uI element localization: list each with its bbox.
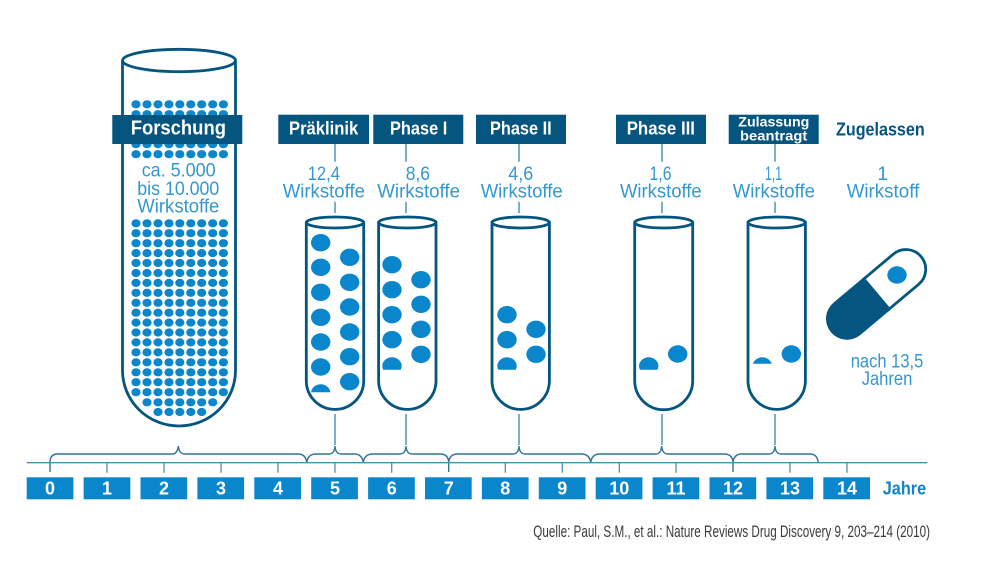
tube: Phase III	[635, 217, 693, 410]
header: Zulassung beantragt: Zulassung	[738, 114, 809, 130]
dots: Forschung tube contents	[131, 100, 228, 416]
year boxes 0 to 14: 14	[837, 478, 857, 498]
label: 1,6 Wirkstoffe: Wirkstoffe	[620, 180, 702, 202]
year boxes 0 to 14: 12	[723, 478, 743, 498]
label: 12,4 Wirkstoffe	[283, 163, 365, 202]
label: 8,6 Wirkstoffe	[377, 163, 460, 202]
label: 12,4 Wirkstoffe: 12,4	[308, 163, 340, 185]
tube: Phase I	[379, 217, 436, 409]
header: Zugelassen: Zugelassen	[836, 118, 925, 139]
label: 8,6 Wirkstoffe: 8,6	[406, 163, 430, 185]
header: Forschung	[112, 115, 242, 144]
year boxes 0 to 14: 6	[387, 478, 397, 498]
label: 4,6 Wirkstoffe: Wirkstoffe	[481, 180, 563, 202]
header: Forschung: Forschung	[131, 117, 226, 140]
tube: Phase II	[492, 217, 549, 409]
label: nach 13,5 Jahren: Jahren	[862, 368, 912, 390]
axis label: Jahre: Jahre	[883, 478, 926, 498]
label: 1 Wirkstoff: Wirkstoff	[847, 180, 920, 202]
timeline axis	[27, 463, 927, 473]
braces: phase durations	[50, 446, 818, 472]
label: nach 13,5 Jahren: nach 13,5	[851, 350, 923, 372]
header: Phase II: Phase II	[490, 118, 552, 138]
year boxes 0 to 14: 9	[557, 478, 567, 498]
header: Phase I	[373, 115, 463, 144]
year boxes 0 to 14: 3	[216, 478, 226, 498]
infographic: drug development funnel	[26, 48, 930, 540]
header: Phase II	[476, 115, 566, 144]
year boxes 0 to 14: 7	[444, 478, 454, 498]
header: Phase III	[616, 115, 706, 144]
label: 1,6 Wirkstoffe: 1,6	[650, 163, 672, 185]
label: 1 Wirkstoff	[847, 163, 920, 202]
year boxes 0 to 14: 5	[330, 478, 340, 498]
label: nach 13,5 Jahren	[851, 350, 923, 390]
label: 1,1 Wirkstoffe: Wirkstoffe	[733, 180, 815, 202]
year boxes 0 to 14: 0	[45, 478, 55, 498]
label: 4,6 Wirkstoffe: 4,6	[508, 163, 533, 185]
connectors between headers, labels and tubes	[335, 144, 775, 445]
tube: Zulassung beantragt	[748, 217, 805, 409]
year boxes 0 to 14: 1	[102, 478, 112, 498]
year boxes 0 to 14: 13	[780, 478, 800, 498]
tube: Präklinik	[306, 217, 364, 409]
year boxes 0 to 14: 10	[609, 478, 629, 498]
header: Phase III: Phase III	[627, 118, 695, 138]
label: 8,6 Wirkstoffe: Wirkstoffe	[377, 180, 460, 202]
label: 1,6 Wirkstoffe	[620, 163, 702, 202]
label: Forschung count: ca. 5.000	[142, 160, 216, 182]
label: 1,1 Wirkstoffe	[733, 163, 815, 202]
header: Zulassung beantragt: beantragt	[740, 128, 808, 144]
header: Zulassung beantragt	[729, 114, 819, 144]
label: 1,1 Wirkstoffe: 1,1	[765, 163, 782, 185]
year boxes 0 to 14	[27, 477, 870, 499]
header: Präklinik	[278, 115, 369, 144]
icon: capsule	[817, 241, 935, 348]
label: 12,4 Wirkstoffe: Wirkstoffe	[283, 180, 365, 202]
header: Phase I: Phase I	[390, 118, 447, 138]
year boxes 0 to 14: 8	[500, 478, 510, 498]
year boxes 0 to 14: 11	[666, 478, 686, 498]
tube: Forschung	[122, 49, 236, 426]
label: 1 Wirkstoff: 1	[877, 163, 888, 185]
label: Forschung count: bis 10.000	[137, 178, 219, 200]
header: Präklinik: Präklinik	[289, 118, 359, 138]
label: 4,6 Wirkstoffe	[481, 163, 563, 202]
label: Forschung count: Wirkstoffe	[137, 196, 219, 218]
label: Forschung count	[137, 160, 219, 218]
year boxes 0 to 14: 4	[273, 478, 283, 498]
year boxes 0 to 14: 2	[159, 478, 169, 498]
